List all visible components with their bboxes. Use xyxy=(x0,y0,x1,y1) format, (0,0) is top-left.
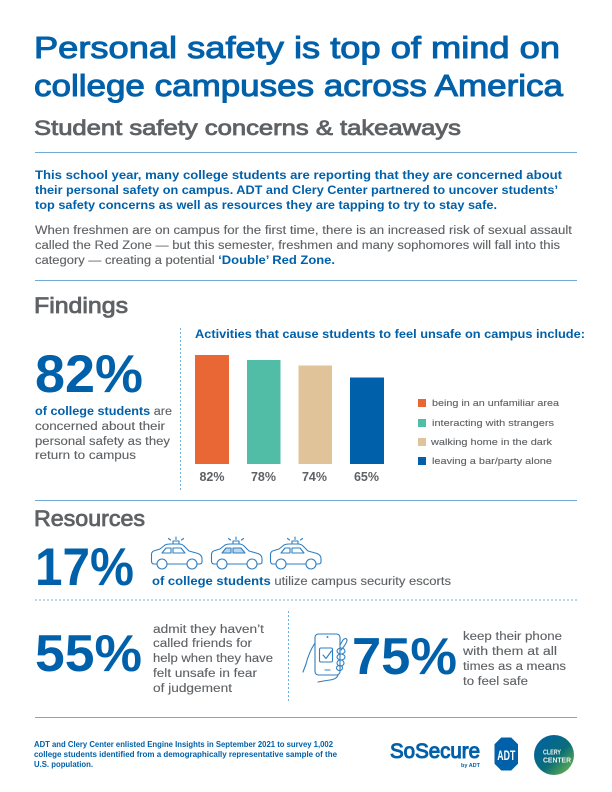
icon: three security cars xyxy=(152,537,321,569)
Red Zone paragraph: When freshmen are on campus for the first time, there is an increased risk of sexual assault xyxy=(35,225,573,237)
text: campus security escorts: of college students utilize campus security escorts xyxy=(152,576,451,588)
text: 75% description: times as a means xyxy=(463,661,566,673)
text: 55% description xyxy=(153,624,273,695)
text: 55% description: help when they have xyxy=(153,653,273,665)
chart legend: being in an unfamiliar area xyxy=(432,398,560,409)
Red Zone paragraph xyxy=(35,225,573,267)
stat: 75%: 75% xyxy=(352,628,457,686)
logo: SoSecure by ADT: by ADT xyxy=(461,763,481,769)
bar chart: 74% xyxy=(302,470,327,484)
heading: Findings: Findings xyxy=(34,293,128,318)
stat: 17%: 17% xyxy=(35,538,134,597)
stat: 82% of college students: personal safety as they xyxy=(35,436,170,448)
logo: Clery Center xyxy=(534,735,574,775)
stat: 82% of college students: of college students are xyxy=(35,406,172,418)
chart legend: leaving a bar/party alone xyxy=(432,456,552,467)
intro paragraph in blue xyxy=(35,170,562,212)
Red Zone paragraph: category — creating a potential ‘Double’ Red Zone. xyxy=(35,255,335,267)
title: college campuses across America xyxy=(34,68,564,103)
stat: 82% of college students: 82% xyxy=(35,345,143,404)
bar chart: 78% xyxy=(251,470,276,484)
intro paragraph in blue: their personal safety on campus. ADT and Clery Center partnered to uncover students’ xyxy=(35,185,558,197)
intro paragraph in blue: This school year, many college students are reporting that they are concerned about xyxy=(35,170,562,182)
footnote xyxy=(34,740,338,769)
bar chart: 65% xyxy=(354,470,379,484)
text: 75% description: keep their phone xyxy=(463,631,562,643)
text: 55% description: felt unsafe in fear xyxy=(153,668,257,680)
Red Zone paragraph: called the Red Zone — but this semester, freshmen and many sophomores will fall into this xyxy=(35,240,560,252)
stat: 82% of college students xyxy=(35,345,172,462)
text: 55% description: called friends for xyxy=(153,638,252,650)
footnote: college students identified from a demographically representative sample of the xyxy=(34,750,338,759)
intro paragraph in blue: top safety concerns as well as resources they are tapping to try to stay safe. xyxy=(35,200,497,212)
bar chart: 82% xyxy=(199,470,225,484)
logo: SoSecure by ADT: SoSecure xyxy=(390,740,480,763)
stat: 82% of college students: concerned about their xyxy=(35,421,165,433)
logo: Clery Center: CLERY xyxy=(543,750,561,756)
stat: 82% of college students: return to campus xyxy=(35,450,136,462)
title xyxy=(34,30,564,103)
chart legend xyxy=(418,398,560,467)
stat: 55%: 55% xyxy=(35,625,142,683)
logo: Clery Center: CENTER xyxy=(543,758,571,764)
text: 75% description: to feel safe xyxy=(463,676,528,688)
icon: hand holding phone with checkmark xyxy=(303,634,347,682)
logo: ADT octagon: ADT xyxy=(497,747,516,763)
bar chart xyxy=(195,355,384,484)
chart legend: interacting with strangers xyxy=(432,418,554,429)
chart legend: walking home in the dark xyxy=(430,437,552,448)
text: 55% description: of judgement xyxy=(153,683,233,695)
heading: Resources: Resources xyxy=(34,506,145,531)
text: 55% description: admit they haven’t xyxy=(153,624,265,636)
text: 75% description xyxy=(462,631,566,688)
title: Personal safety is top of mind on xyxy=(34,30,560,65)
footnote: U.S. population. xyxy=(34,760,93,769)
chart heading: Activities that cause students to feel unsafe on campus include: xyxy=(195,327,585,341)
subtitle: Student safety concerns & takeaways xyxy=(34,117,461,140)
footnote: ADT and Clery Center enlisted Engine Insights in September 2021 to survey 1,002 xyxy=(34,740,334,749)
logo: ADT octagon xyxy=(495,738,518,770)
text: 75% description: with them at all xyxy=(462,646,557,658)
